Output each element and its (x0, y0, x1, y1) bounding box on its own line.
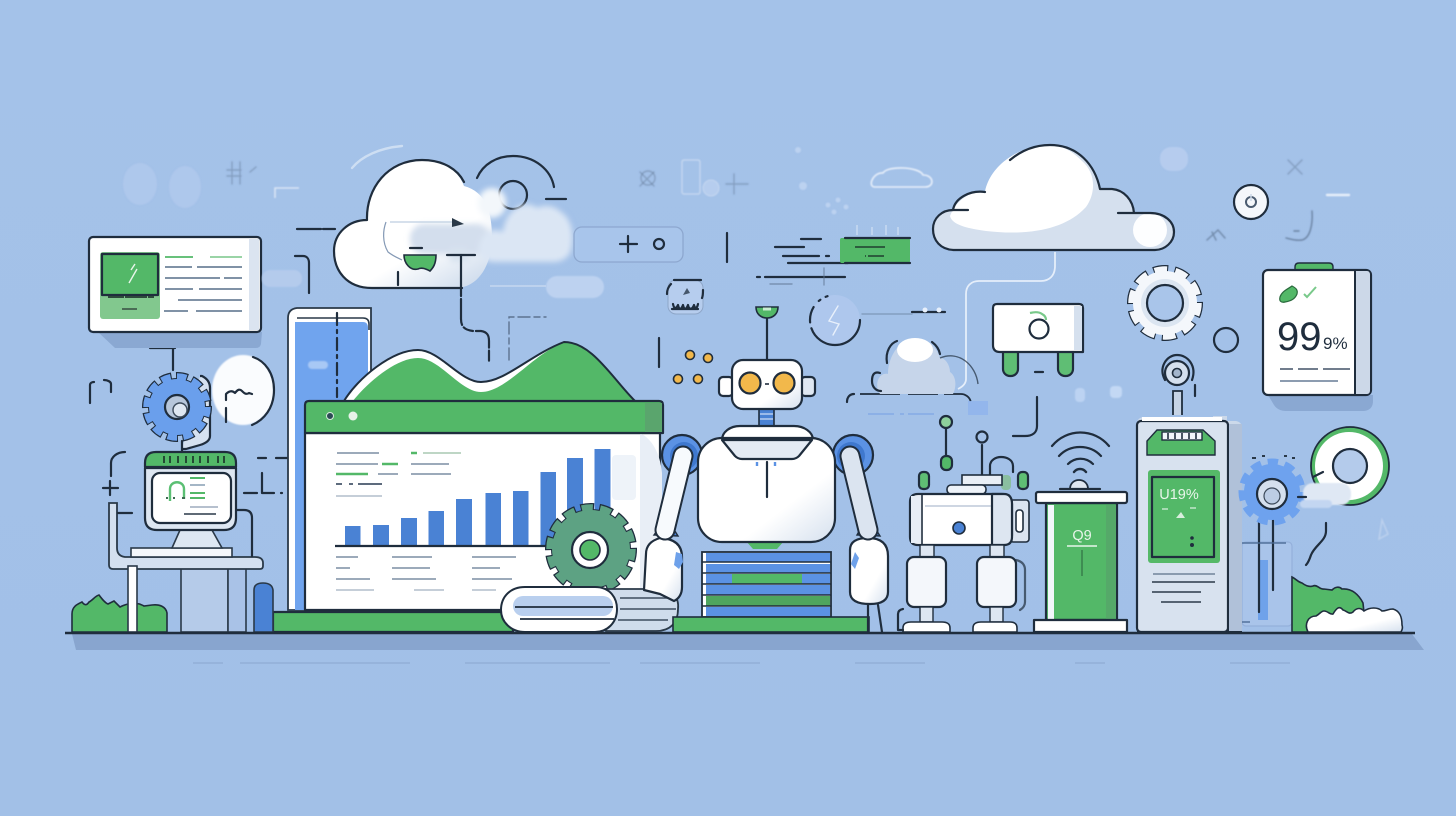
ground shadow (72, 634, 1424, 650)
arch with ring behind cloud (477, 156, 566, 209)
pill rollers (501, 587, 678, 632)
blue gear right (1242, 456, 1301, 622)
speech bubble (212, 355, 274, 425)
green bush (1292, 577, 1366, 632)
pill control (262, 227, 683, 298)
base platform left (273, 612, 513, 632)
connector faint box (1242, 542, 1292, 626)
shoulders (662, 435, 873, 475)
window body (305, 433, 660, 610)
top small dial (1234, 185, 1268, 219)
desk (109, 503, 263, 632)
robot side unit (1010, 500, 1029, 542)
neck (759, 409, 774, 427)
tower antenna (1163, 355, 1195, 415)
tower readout: U19% (1159, 487, 1199, 503)
connector lines (90, 229, 1326, 565)
small robot (898, 416, 1029, 632)
percentage value: 99 (1277, 315, 1322, 359)
head (732, 360, 802, 409)
torso (698, 438, 835, 542)
percentage card: 9% (1323, 334, 1348, 353)
ring outline (1214, 328, 1238, 352)
legs (898, 545, 1025, 632)
faint background icons (123, 147, 1388, 539)
wifi arcs (1052, 432, 1109, 472)
left forearm (644, 528, 683, 601)
browser dashboard window (305, 401, 663, 610)
white bush (1306, 608, 1402, 632)
robot top (962, 475, 1002, 485)
blue canister (254, 583, 273, 632)
tall blue panel (288, 308, 371, 610)
check mark icon (1280, 286, 1297, 302)
tower green tab (1147, 430, 1215, 455)
right forearm (850, 528, 888, 632)
blue gear left (147, 355, 274, 452)
green status box (840, 225, 910, 263)
ears (719, 377, 733, 396)
card body (89, 237, 261, 332)
bar chart (335, 449, 610, 546)
percentage card body (1263, 270, 1371, 395)
antenna pods (919, 416, 1028, 490)
card green thumbnail (100, 252, 160, 319)
left info card (89, 237, 262, 348)
window header (305, 401, 663, 433)
small cloud middle (847, 338, 988, 415)
eyes (740, 372, 760, 394)
percentage card top tab (1295, 263, 1333, 270)
lightning circle (810, 295, 945, 345)
percentage card shadow (1268, 395, 1373, 411)
table lines (336, 557, 516, 590)
column cap (1036, 492, 1127, 503)
tower green panel (1148, 470, 1220, 563)
green gear center (550, 508, 632, 590)
green mountains (343, 342, 636, 402)
stacked base (673, 541, 869, 632)
arms (665, 456, 868, 530)
shoulder plate (722, 426, 813, 440)
percentage card (1263, 263, 1373, 411)
cloud green badge (404, 255, 436, 271)
hazy overlay clouds (410, 188, 573, 262)
cloud silhouette (334, 160, 492, 288)
tower body (1137, 416, 1242, 632)
white gear (1132, 270, 1198, 336)
column body (1046, 503, 1117, 620)
main robot (644, 307, 888, 632)
monitor (145, 452, 236, 548)
right bushes (1292, 577, 1402, 632)
jar icon (667, 280, 703, 314)
card shadow (98, 332, 262, 348)
bottom faint dashes (193, 662, 1290, 664)
monitor desk workstation (72, 452, 273, 632)
percentage card lines (1280, 368, 1350, 370)
card text lines (164, 257, 242, 311)
robot body (910, 494, 1012, 545)
left cloud (334, 146, 573, 288)
column label: Q9 (1072, 528, 1092, 544)
yellow dots (674, 350, 712, 384)
tower text lines (1153, 573, 1215, 575)
left bush (72, 595, 167, 632)
green donut ring (1298, 427, 1389, 508)
antenna (756, 307, 778, 360)
column base (1034, 620, 1127, 632)
dome (1070, 480, 1088, 489)
wifi column (1034, 432, 1127, 632)
window text lines (336, 453, 461, 496)
sensor box with legs (993, 304, 1083, 376)
server tower (1137, 355, 1242, 632)
ground line (65, 632, 1415, 634)
right cloud (933, 145, 1174, 250)
